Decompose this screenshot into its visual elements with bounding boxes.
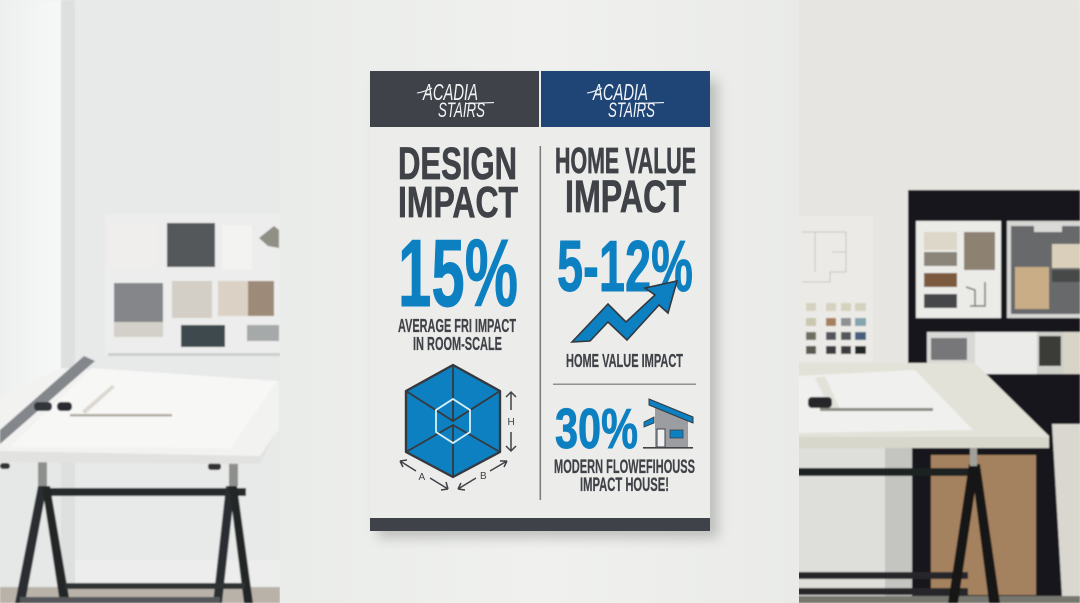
header: right logo panel <box>541 71 710 127</box>
dimension labels: A <box>418 472 426 483</box>
caption: average impact <box>398 315 516 354</box>
section rule <box>553 384 696 385</box>
heading: design impact <box>398 138 518 227</box>
heading: home value impact: IMPACT <box>565 171 686 222</box>
material swatches on left wall <box>108 222 280 356</box>
left drafting table <box>0 356 279 603</box>
caption: modern house impact: IMPACT HOUSE! <box>580 475 669 496</box>
heading: home value impact <box>555 140 696 222</box>
header: left logo panel <box>370 71 539 127</box>
stat: 5-12%: 5-12% <box>557 227 693 307</box>
dimension labels <box>418 417 515 483</box>
column divider <box>540 146 541 500</box>
header: right logo panel: ACADIA <box>592 79 648 105</box>
caption: average impact: IN ROOM-SCALE <box>413 333 502 354</box>
heading: home value impact: HOME VALUE <box>555 140 696 181</box>
caption: average impact: AVERAGE FRI IMPACT <box>398 315 516 336</box>
dimension labels: B <box>480 471 487 482</box>
caption: modern house impact: MODERN FLOWEFIHOUSS <box>554 457 695 478</box>
right drafting table <box>798 363 1049 448</box>
icon: rising arrow <box>572 281 677 342</box>
black pin board <box>908 190 1080 598</box>
poster <box>370 71 710 531</box>
stat: 30%: 30% <box>555 397 638 461</box>
poster shadow <box>378 80 718 538</box>
dimension arrows <box>400 392 516 490</box>
left studio background <box>0 0 282 603</box>
right lower furniture <box>798 424 1080 603</box>
icon: hexagonal room cube <box>400 365 516 490</box>
material sample boards <box>916 221 1080 374</box>
dimension labels: H <box>508 417 515 428</box>
stat: 15%: 15% <box>398 220 518 327</box>
heading: design impact: DESIGN <box>398 138 517 189</box>
caption: modern house impact <box>554 457 695 496</box>
caption: home value impact: HOME VALUE IMPACT <box>566 351 683 371</box>
heading: design impact: IMPACT <box>398 178 518 227</box>
centre wall <box>280 0 799 603</box>
header: right logo panel: STAIRS <box>608 99 655 122</box>
header: left logo panel: ACADIA <box>422 79 478 105</box>
icon: modern house <box>643 399 693 449</box>
right studio background <box>798 0 1080 603</box>
footer band <box>370 518 710 531</box>
plan and colour chart board <box>798 216 873 362</box>
header: left logo panel: STAIRS <box>438 99 485 122</box>
